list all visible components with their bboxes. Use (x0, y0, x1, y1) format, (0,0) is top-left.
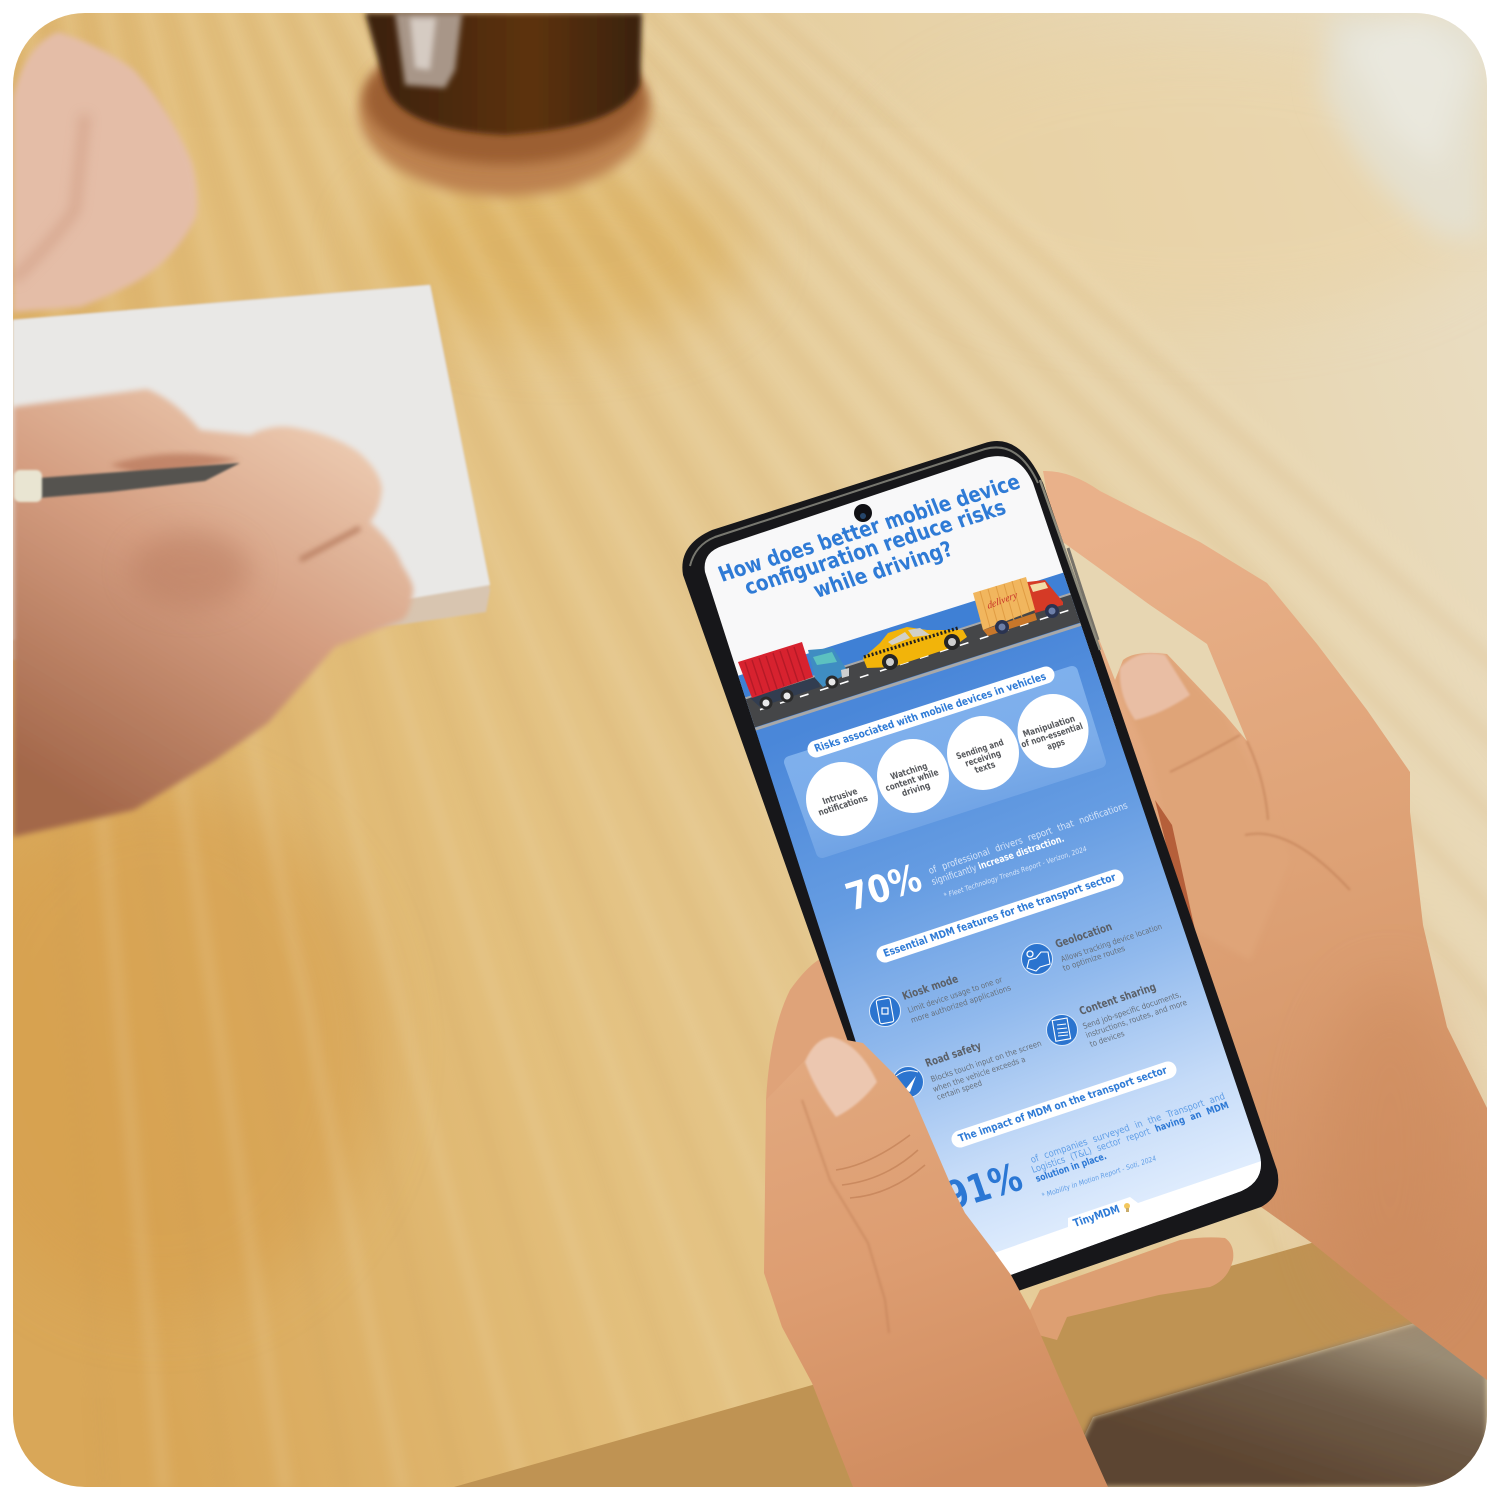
circle: watching content: Watching (889, 762, 929, 783)
title: How does better mobile device (715, 470, 1024, 588)
blue sky band (690, 561, 1110, 770)
icon: speedometer (892, 1066, 924, 1098)
circle: watching content: content while (884, 768, 940, 794)
statistic description (927, 801, 1129, 900)
feature: kiosk mode: Kiosk mode (900, 972, 960, 1003)
table side edge (454, 1243, 1413, 1487)
delivery script label: delivery (986, 589, 1019, 612)
circle: watching content (877, 739, 949, 813)
feature: kiosk mode: more authorized applications (909, 983, 1012, 1025)
feature: content sharing (1046, 980, 1188, 1049)
left hand holding phone (764, 1037, 1108, 1487)
statistic description: significantly increase distraction. (930, 834, 1066, 888)
circle: sending texts: Sending and (955, 738, 1005, 762)
icon: phone lock (870, 996, 900, 1026)
right thumb (1126, 656, 1201, 702)
floor beneath table (1082, 1322, 1487, 1487)
title: configuration reduce risks (741, 495, 1010, 601)
circle: intrusive notifications: Intrusive (821, 787, 859, 807)
knuckle creases (836, 1135, 925, 1198)
thumb nail (805, 1037, 877, 1117)
feature: road safety: Road safety (923, 1039, 983, 1070)
side button (1068, 548, 1098, 640)
icon: map pin (1022, 944, 1052, 974)
statistic: 91%: 91% (939, 1155, 1028, 1219)
circle: manipulation of apps: of non-essential (1020, 722, 1085, 750)
pill heading: risks: Risks associated with mobile devices in vehicles (813, 671, 1048, 755)
wood visible between finger and thumb (1060, 540, 1247, 741)
background hand: resting (13, 32, 197, 312)
statistic: 70% (840, 801, 1129, 920)
statistic description: of professional drivers report that notifications (927, 801, 1129, 877)
statistic description: Logistics (T&L) sector report having an MDM (1030, 1100, 1231, 1176)
phone metal rim (690, 447, 1038, 566)
feature: kiosk mode (870, 972, 1012, 1026)
red container truck (738, 642, 849, 710)
smartphone (682, 441, 1278, 1290)
icon: document (1046, 1014, 1078, 1046)
statistic description: of companies surveyed in the Transport and (1029, 1091, 1227, 1166)
statistic description: * Fleet Technology Trends Report - Verizon, 2024 (943, 845, 1088, 900)
pill heading: impact: The impact of MDM on the transport sector (957, 1064, 1170, 1145)
phone body (682, 441, 1278, 1316)
road (700, 581, 1110, 747)
screen (680, 430, 1300, 1340)
yellow taxi (863, 627, 967, 670)
right metal edge (1040, 480, 1100, 650)
feature: geolocation: to optimize routes (1061, 944, 1126, 973)
notebook (13, 285, 490, 660)
title: while driving? (810, 537, 957, 604)
circle: manipulation of apps: Manipulation (1022, 714, 1077, 740)
line between fingers (802, 1100, 889, 1333)
circle: manipulation of apps (1018, 694, 1088, 768)
circle: watching content: driving (901, 781, 932, 799)
background hand: writing (13, 389, 413, 837)
feature: content sharing: Send job-specific documents, (1081, 990, 1182, 1031)
circle: intrusive notifications (806, 762, 878, 836)
panel: risks (790, 671, 1100, 852)
circle: intrusive notifications: notifications (817, 794, 869, 818)
feature: kiosk mode: Limit device usage to one or (906, 975, 1004, 1015)
pill heading: features: Essential MDM features for the transport sector (882, 871, 1118, 960)
water glass (1322, 13, 1487, 240)
right hand holding phone (1043, 471, 1487, 1380)
feature: content sharing: instructions, routes, and more (1084, 998, 1188, 1040)
footer white band (960, 1158, 1300, 1320)
left index finger behind phone (766, 960, 848, 1100)
statistic: 91% (939, 1091, 1231, 1219)
thumb nail (1120, 653, 1190, 720)
statistic description: * Mobility in Motion Report - Soti, 2024 (1041, 1155, 1158, 1200)
thumb crease (1170, 735, 1350, 890)
feature: content sharing: Content sharing (1077, 980, 1158, 1018)
circle: sending texts (947, 716, 1019, 790)
feature: geolocation: Allows tracking device location (1059, 922, 1163, 964)
pen (14, 463, 240, 502)
feature: road safety: when the vehicle exceeds a (931, 1055, 1027, 1094)
circle: manipulation of apps: apps (1046, 738, 1067, 752)
statistic description: solution in place. (1034, 1151, 1108, 1185)
finger under phone (1020, 1237, 1233, 1340)
main gradient background (700, 604, 1300, 1340)
feature: geolocation: Geolocation (1053, 920, 1114, 951)
feature: road safety: certain speed (935, 1079, 983, 1102)
feature: road safety: Blocks touch input on the screen (929, 1039, 1043, 1084)
feature: geolocation (1022, 920, 1163, 974)
statistic description (1029, 1091, 1231, 1200)
crease on resting hand (13, 115, 85, 280)
statistic: 70%: 70% (840, 856, 927, 920)
delivery truck (973, 577, 1063, 636)
screen header background (680, 430, 1300, 730)
coffee cup on coaster (359, 13, 651, 196)
circle: sending texts: receiving (964, 749, 1003, 769)
feature: road safety (892, 1039, 1043, 1102)
footer logo: TinyMDM (1071, 1203, 1122, 1230)
feature: content sharing: to devices (1088, 1029, 1126, 1049)
shadow beside phone (1155, 800, 1195, 930)
circle: sending texts: texts (973, 760, 997, 776)
icon: light bulb (1124, 1203, 1130, 1212)
front camera (854, 504, 872, 522)
